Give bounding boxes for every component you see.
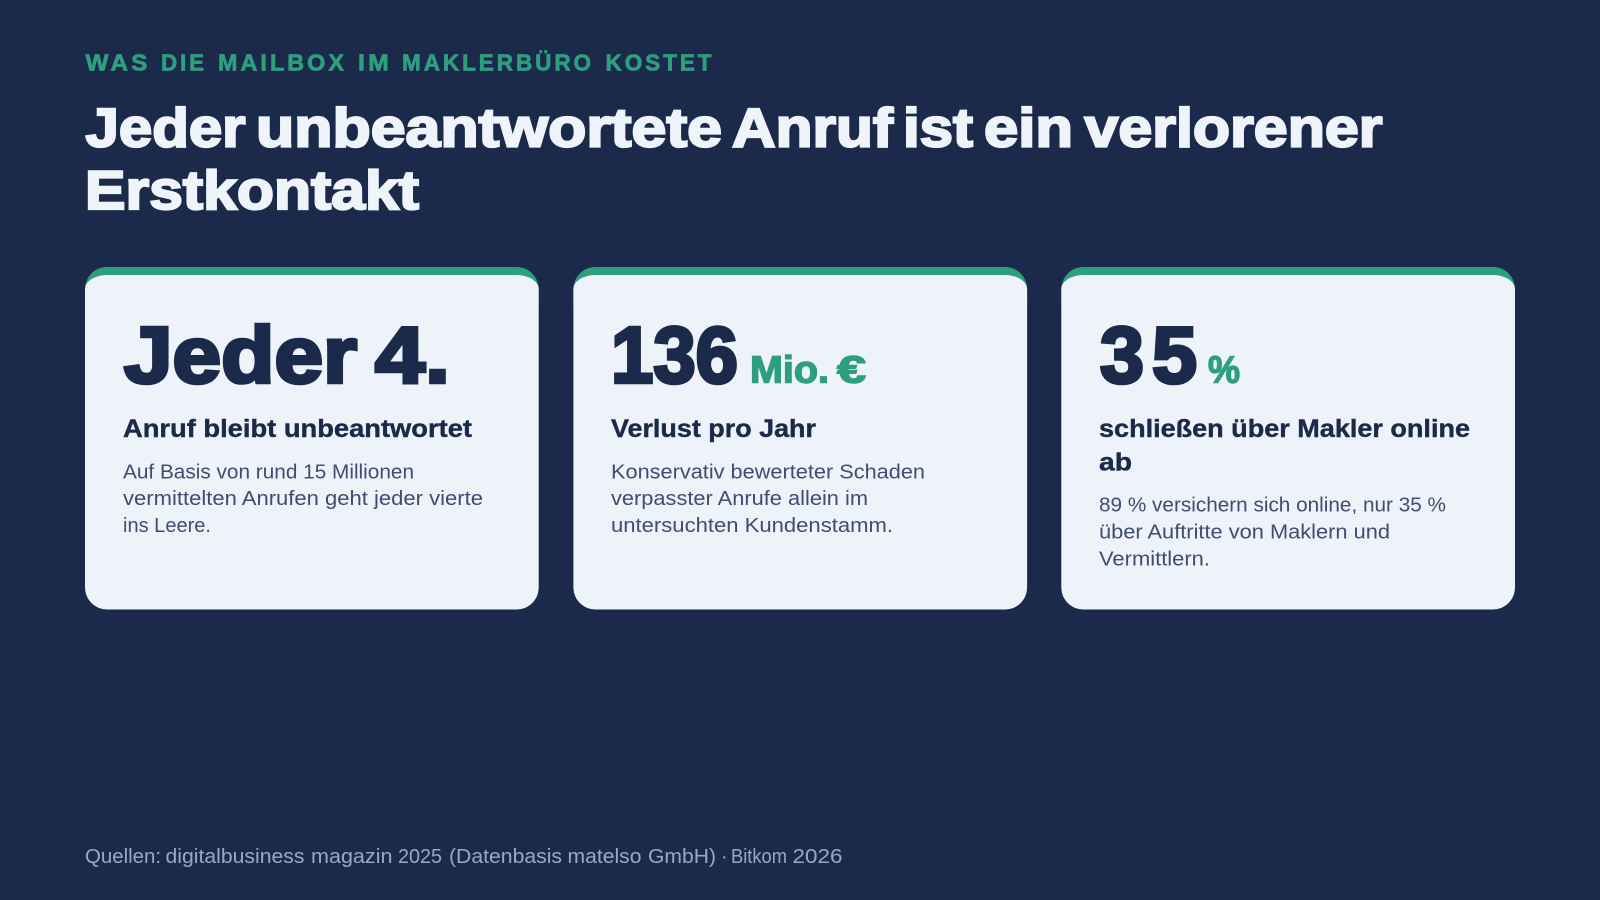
source footnote: digitalbusiness (166, 846, 304, 868)
title: unbeantwortete (256, 96, 722, 158)
unit: Mio. €: Mio. (750, 350, 829, 392)
eyebrow heading: KOSTET (606, 50, 714, 76)
big number: 35: 5 (1152, 310, 1197, 400)
eyebrow heading: MAILBOX (218, 50, 347, 76)
eyebrow heading: DIE (161, 50, 207, 76)
description: untersuchten Kundenstamm. (611, 515, 893, 537)
description (611, 462, 925, 537)
unit: Mio. € (750, 350, 866, 392)
description: 89 % versichern sich online, nur 35 % (1099, 494, 1446, 516)
subheading: ab (1099, 448, 1132, 476)
source footnote: GmbH) (648, 846, 716, 868)
big number: Jeder 4.: 4. (375, 310, 450, 400)
eyebrow heading (86, 50, 714, 76)
description: ins Leere. (123, 515, 211, 537)
description (1099, 494, 1446, 570)
big number: Jeder 4.: Jeder (124, 310, 357, 400)
source footnote: · (721, 846, 728, 868)
subheading (1099, 415, 1470, 476)
eyebrow heading: WAS (86, 50, 150, 76)
title: ein (984, 96, 1073, 158)
source footnote: Quellen: (85, 846, 161, 868)
description: Vermittlern. (1099, 548, 1210, 570)
description: verpasster Anrufe allein im (611, 488, 868, 510)
title: ist (903, 96, 973, 158)
title: Erstkontakt (85, 159, 419, 221)
panel: card 2 (573, 267, 1027, 610)
title: Jeder (86, 96, 246, 158)
title (85, 96, 1382, 221)
title: Anruf (732, 96, 894, 158)
unit: Mio. €: € (837, 350, 866, 392)
eyebrow heading: MAKLERBÜRO (402, 50, 594, 76)
big number: 35 (1100, 310, 1197, 400)
source footnote (85, 846, 842, 868)
source footnote: matelso (568, 846, 642, 868)
description: Konservativ bewerteter Schaden (611, 462, 925, 484)
panel: card 1 (85, 267, 539, 610)
subheading: Anruf bleibt unbeantwortet (123, 415, 473, 443)
source footnote: 2025 (398, 846, 442, 868)
title: verlorener (1084, 96, 1382, 158)
description: vermittelten Anrufen geht jeder vierte (123, 488, 483, 510)
big number: 35: 3 (1100, 310, 1144, 400)
description: Auf Basis von rund 15 Millionen (123, 462, 414, 484)
description: über Auftritte von Maklern und (1099, 522, 1390, 544)
subheading: schließen über Makler online (1099, 415, 1470, 443)
description (123, 462, 483, 537)
source footnote: 2026 (792, 846, 842, 868)
big number: Jeder 4. (124, 310, 450, 400)
eyebrow heading: IM (358, 50, 392, 76)
big number: 136: 136 (611, 310, 738, 400)
panel: card 3 (1061, 267, 1515, 610)
source footnote: Bitkom (731, 846, 787, 868)
unit: percent: % (1208, 350, 1240, 392)
source footnote: (Datenbasis (449, 846, 562, 868)
subheading: Verlust pro Jahr (611, 415, 816, 443)
source footnote: magazin (311, 846, 392, 868)
